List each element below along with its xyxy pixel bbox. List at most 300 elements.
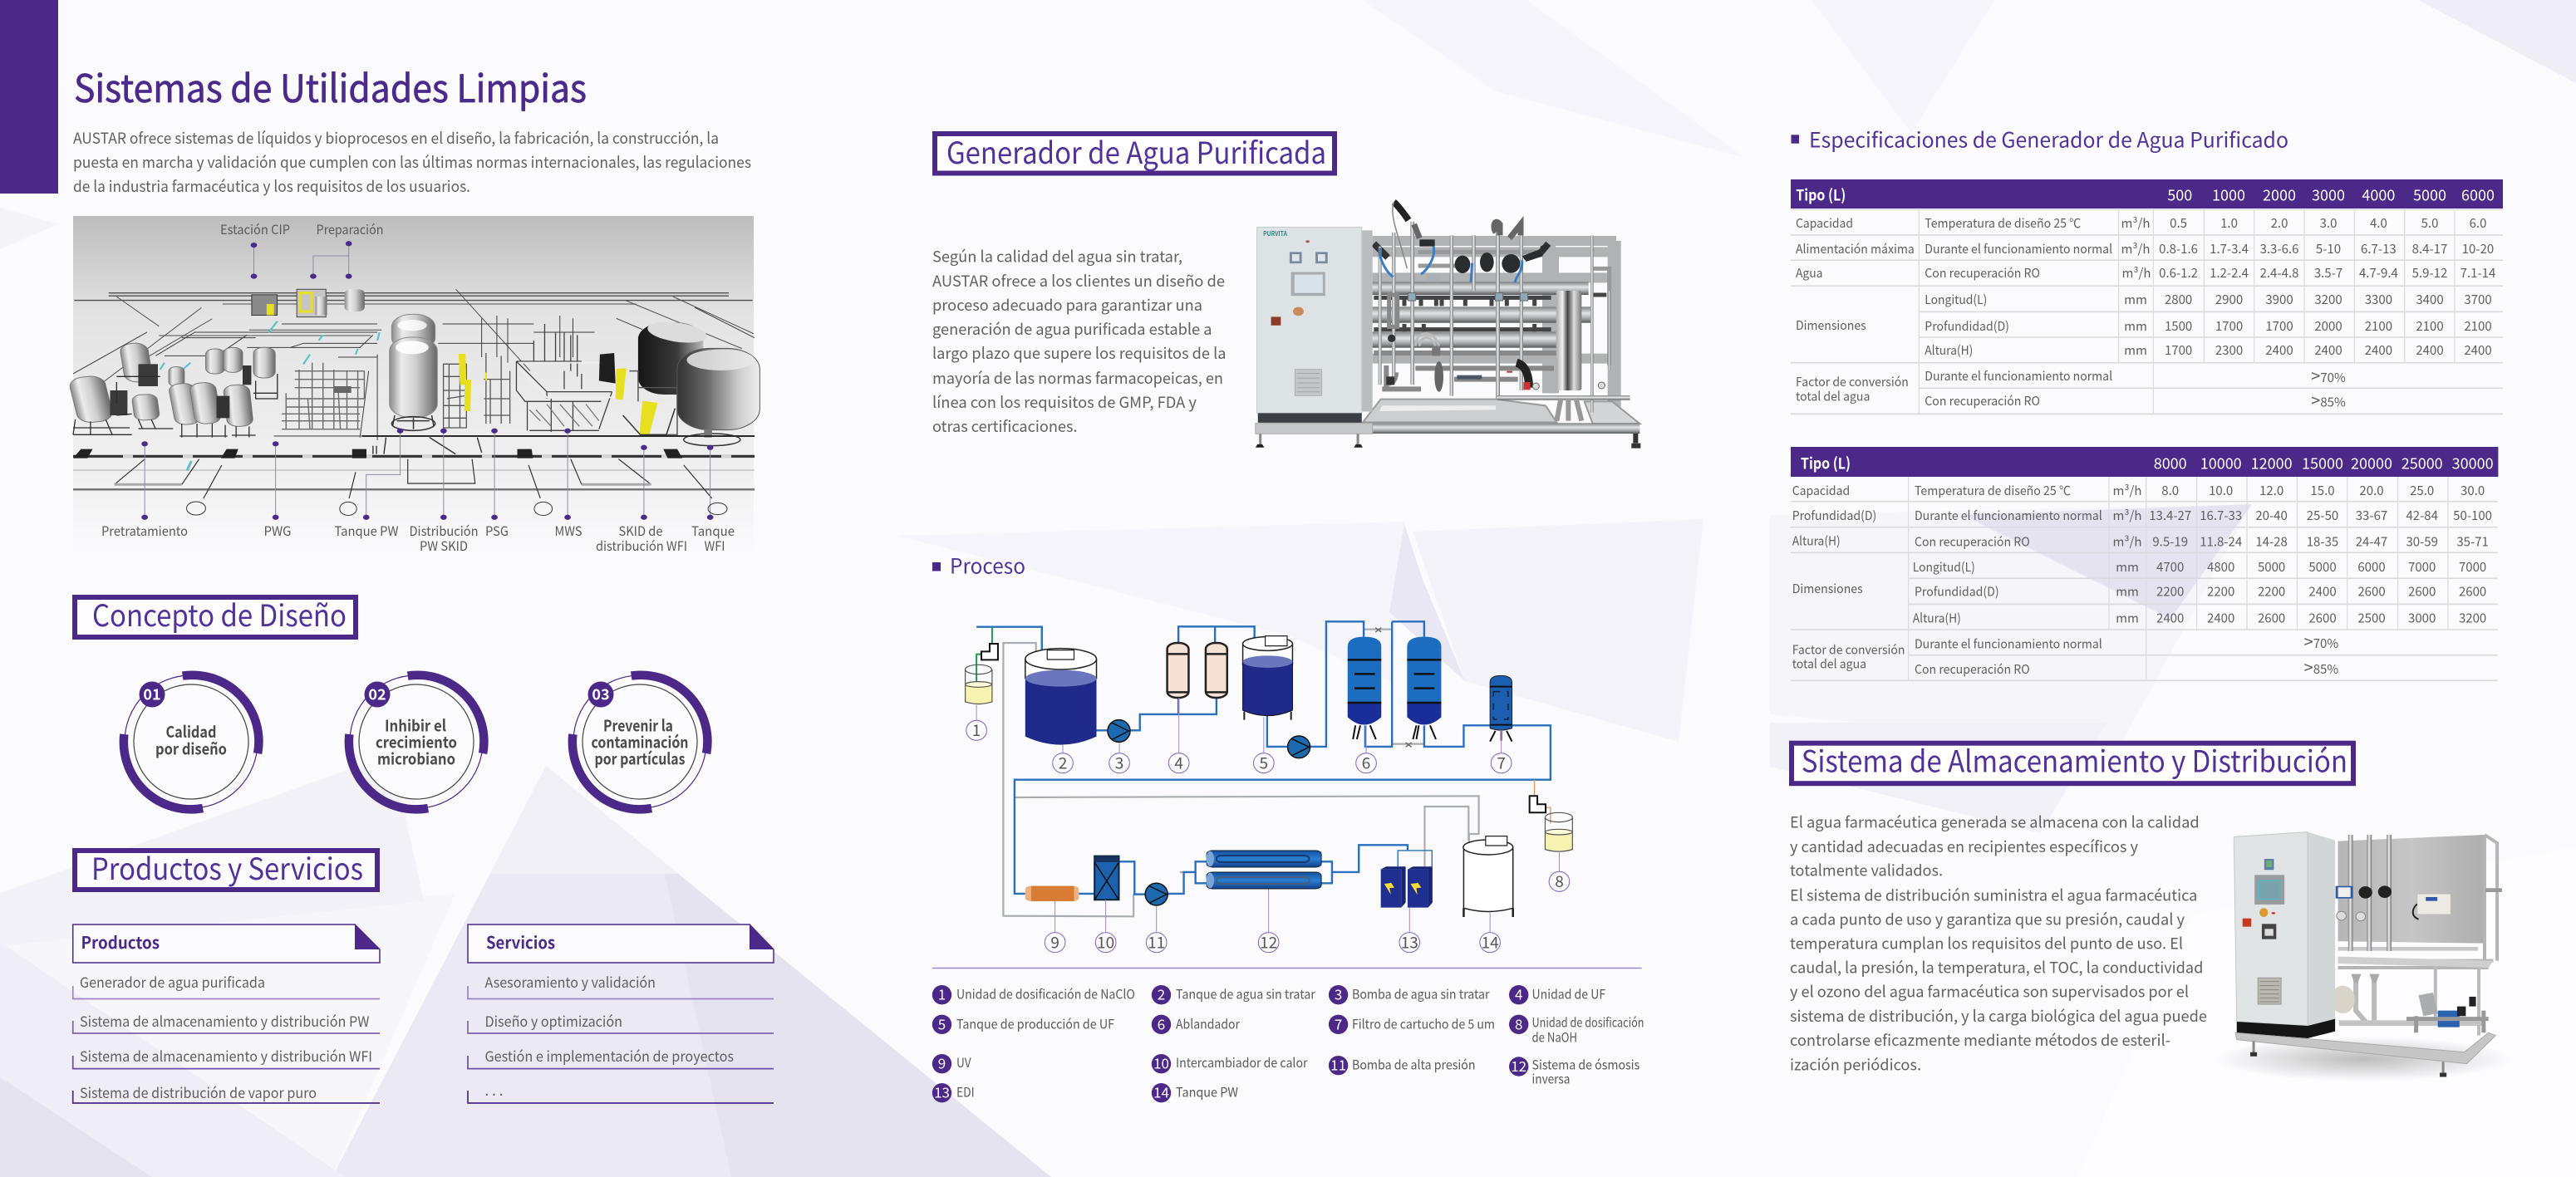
process legend: Bomba de alta presión	[1352, 1055, 1476, 1073]
purified water paragraph: otras certificaciones.	[932, 415, 1077, 437]
specification table 2: Profundidad(D)	[1915, 582, 1999, 600]
specification table 2: Altura(H)	[1792, 532, 1841, 550]
specification table 1: 2800	[2165, 291, 2192, 308]
storage and distribution paragraph: ización periódicos.	[1790, 1053, 1921, 1075]
table 1 header: 3000	[2312, 184, 2345, 206]
specification table 1: Alimentación máxima	[1796, 240, 1915, 257]
design concept ring 02: crecimiento	[376, 731, 457, 753]
design concept ring 01: Calidad	[166, 720, 216, 743]
purified water paragraph: línea con los requisitos de GMP, FDA y	[932, 391, 1197, 413]
table 1 header: 5000	[2413, 184, 2446, 206]
specification table 2: 8.0	[2161, 482, 2179, 499]
specification table 1: >70%	[2311, 363, 2346, 387]
specification table 2: Con recuperación RO	[1915, 660, 2030, 678]
panel: Productos list: Sistema de distribución de vapor puro	[80, 1081, 317, 1102]
process legend: 7	[1335, 1013, 1342, 1033]
base tray	[2235, 1032, 2495, 1064]
specification table 1: 2.0	[2271, 214, 2288, 232]
plant 3D layout image: PWG	[264, 522, 291, 540]
table 2 header: 25000	[2401, 452, 2443, 473]
table 2 header: 10000	[2200, 452, 2242, 473]
design concept ring 02: Inhibir el	[385, 714, 446, 736]
table 2 header	[1791, 447, 2498, 477]
process flow diagram: 13	[1401, 930, 1418, 954]
process legend: 3	[1335, 983, 1342, 1004]
specification table 2: 6000	[2357, 558, 2386, 576]
process flow diagram: 8	[1555, 870, 1564, 892]
heading: Productos y Servicios: Productos y Servicios	[91, 846, 363, 889]
plant 3D layout image: PW SKID	[420, 537, 468, 555]
intro text block: AUSTAR ofrece sistemas de líquidos y bioprocesos en el diseño, la fabricación, la construcción, la	[73, 127, 719, 149]
design concept ring 01: por diseño	[155, 738, 227, 759]
intro text block	[73, 127, 751, 197]
table 2 header: Tipo (L)	[1801, 452, 1851, 473]
specification table 1: 3700	[2464, 291, 2492, 308]
tank 14	[1463, 836, 1513, 917]
specification table 1: 1.7-3.4	[2210, 240, 2249, 257]
productos tab	[73, 924, 380, 963]
panel: Productos list: Sistema de almacenamiento y distribución PW	[80, 1010, 370, 1031]
plant 3D layout image: Estación CIP	[220, 220, 290, 238]
process legend: Filtro de cartucho de 5 um	[1352, 1014, 1495, 1032]
specification table 1: 2100	[2416, 317, 2444, 335]
specification table 2: m³/h	[2112, 507, 2142, 524]
specification table 2: mm	[2116, 558, 2139, 576]
specification table 2: 2400	[2207, 609, 2234, 626]
specification table 1: Dimensiones	[1796, 316, 1866, 334]
specification table 2: 7000	[2408, 558, 2436, 576]
callouts	[141, 241, 727, 520]
specification table 1: 4.0	[2370, 214, 2387, 232]
specification table 2: 2600	[2357, 582, 2386, 600]
specification table 1: mm	[2124, 291, 2147, 308]
lower piping	[2356, 978, 2374, 1024]
beaker 1	[966, 665, 992, 704]
specification table 1: 3900	[2265, 291, 2293, 308]
specification table 2: 35-71	[2456, 532, 2489, 550]
process legend: 2	[1158, 983, 1165, 1004]
specification table 1: Altura(H)	[1925, 341, 1973, 359]
design concept ring 02	[349, 675, 484, 809]
specification table 1: 3.0	[2320, 214, 2337, 232]
specification table 2: 12.0	[2259, 482, 2283, 499]
title: Sistemas de Utilidades Limpias	[74, 59, 587, 114]
specification table 1: Durante el funcionamiento normal	[1925, 240, 2112, 257]
specification table 1: Con recuperación RO	[1925, 392, 2040, 409]
specification table 1: Factor de conversión	[1796, 373, 1909, 390]
table 2 header: 15000	[2302, 452, 2343, 473]
specification table 2: 2500	[2357, 609, 2386, 626]
specification table 2: 3000	[2408, 609, 2436, 626]
left purple accent bar	[0, 0, 58, 194]
specification table 2: 13.4-27	[2149, 507, 2191, 524]
specification table 2: 25.0	[2410, 482, 2434, 499]
storage and distribution paragraph: El sistema de distribución suministra el agua farmacéutica	[1790, 884, 2197, 905]
inner dark fittings	[1374, 295, 1606, 331]
specification table 1: 2100	[2365, 317, 2392, 335]
UF columns	[1168, 643, 1227, 698]
process flow diagram: 9	[1050, 930, 1059, 954]
plant 3D layout image: Tanque	[691, 522, 735, 540]
specification table 1: >85%	[2311, 387, 2346, 411]
specification table 2: 3200	[2459, 609, 2486, 626]
purified water paragraph: largo plazo que supere los requisitos de la	[932, 342, 1227, 364]
specification table 2: 4700	[2156, 558, 2184, 576]
process legend: 12	[1511, 1055, 1526, 1076]
specification table 2: 14-28	[2255, 532, 2288, 550]
process legend: inversa	[1532, 1069, 1571, 1087]
servicios tab	[468, 924, 774, 963]
specification table 1: 0.5	[2170, 214, 2187, 232]
table 2 header: 30000	[2452, 452, 2494, 473]
PW distribution skid	[444, 353, 510, 428]
design concept ring 01	[124, 675, 258, 809]
process legend: 9	[938, 1052, 946, 1073]
specification table 1: 6.0	[2470, 214, 2486, 232]
specification table 2: 30.0	[2460, 482, 2485, 499]
storage and distribution paragraph: El agua farmacéutica generada se almacena con la calidad	[1790, 812, 2200, 833]
specification table 2: 16.7-33	[2200, 507, 2242, 524]
specification table 2: 42-84	[2406, 507, 2438, 524]
EDI	[1381, 866, 1433, 908]
purified water generator machine illustration	[1256, 202, 1640, 448]
specification table 1: Durante el funcionamiento normal	[1925, 367, 2112, 385]
black actuators	[1419, 239, 1548, 273]
specification table 1: 7.1-14	[2460, 264, 2495, 282]
plant 3D layout image: SKID de	[618, 522, 663, 540]
specification table 2: 33-67	[2356, 507, 2387, 524]
design concept ring 03: Prevenir la	[603, 714, 673, 736]
vertical piping	[1379, 222, 1610, 413]
specification table 2: >70%	[2304, 629, 2338, 653]
process legend: 5	[938, 1013, 946, 1033]
process flow diagram: 7	[1497, 751, 1506, 774]
plant 3D layout image: Pretratamiento	[101, 522, 188, 540]
purified water paragraph: AUSTAR ofrece a los clientes un diseño de	[932, 270, 1225, 292]
process flow diagram: 5	[1260, 751, 1268, 774]
central tanks	[390, 314, 437, 430]
specification table 1: m³/h	[2121, 214, 2151, 232]
subheading: Especificaciones: Especificaciones de Generador de Agua Purificado	[1809, 124, 2288, 154]
specification table 1: Agua	[1796, 264, 1823, 282]
specification table 2: Altura(H)	[1913, 609, 1961, 626]
specification table 2: 10.0	[2209, 482, 2233, 499]
heading: Generador de Agua Purificada: Generador de Agua Purificada	[946, 130, 1326, 173]
specification table 1: m³/h	[2121, 264, 2151, 282]
storage and distribution paragraph: y cantidad adecuadas en recipientes específicos y	[1790, 836, 2138, 857]
specification table 2: 2600	[2258, 609, 2285, 626]
specification table 2: 7000	[2459, 558, 2486, 576]
specification table 1: Capacidad	[1796, 214, 1853, 232]
process legend: 10	[1153, 1052, 1169, 1073]
UV	[1025, 886, 1079, 901]
specification table 2: Dimensiones	[1792, 580, 1863, 597]
storage and distribution paragraph	[1790, 812, 2207, 1075]
PWG skid	[274, 363, 364, 436]
specification table 1: 10-20	[2462, 240, 2494, 257]
specification table 1: Longitud(L)	[1925, 291, 1987, 308]
RO membranes	[1207, 851, 1321, 889]
panel: Servicios list: Gestión e implementación de proyectos	[485, 1045, 734, 1066]
plant 3D layout image: PSG	[485, 522, 509, 540]
specification table 2: m³/h	[2112, 532, 2142, 550]
process legend: Tanque de agua sin tratar	[1176, 985, 1316, 1003]
storage and distribution paragraph: sistema de distribución, y la carga biológica del agua puede	[1790, 1005, 2207, 1027]
plant 3D layout image: distribución WFI	[596, 537, 687, 555]
specification table 2: 18-35	[2307, 532, 2338, 550]
purified water generator machine illustration: PURVITA	[1263, 229, 1288, 238]
table 1 header: 6000	[2461, 184, 2495, 206]
specification table 1: 2400	[2365, 341, 2392, 359]
specification table 2: Profundidad(D)	[1792, 507, 1876, 524]
dosing units	[981, 644, 998, 660]
specification table 1: 6.7-13	[2361, 240, 2397, 257]
panel: Servicios list: Asesoramiento y validación	[485, 971, 656, 992]
cabinet	[1362, 230, 1373, 411]
table 1 header: 4000	[2362, 184, 2395, 206]
purified water paragraph: Según la calidad del agua sin tratar,	[932, 246, 1182, 267]
specification table 1: 8.4-17	[2412, 240, 2447, 257]
process legend: de NaOH	[1532, 1027, 1577, 1046]
specification table 2: Con recuperación RO	[1915, 532, 2030, 550]
heat exchanger	[1094, 856, 1118, 900]
specification table 1: 0.6-1.2	[2159, 264, 2198, 282]
table 1 header: 2000	[2263, 184, 2296, 206]
specification table 2: 30-59	[2406, 532, 2438, 550]
specification table 2	[1791, 447, 2498, 680]
design concept ring 03	[573, 675, 707, 809]
intro text block: de la industria farmacéutica y los requisitos de los usuarios.	[73, 175, 470, 197]
process flow diagram: 6	[1362, 751, 1370, 774]
specification table 2: 9.5-19	[2152, 532, 2188, 550]
specification table 1: 3300	[2365, 291, 2392, 308]
design concept ring 03: 03	[592, 683, 610, 704]
specification table 2: 2600	[2459, 582, 2486, 600]
process legend: Tanque PW	[1176, 1083, 1238, 1101]
floor rail	[73, 436, 755, 459]
specification table 1: 0.8-1.6	[2159, 240, 2198, 257]
divider	[932, 967, 1642, 969]
process legend	[932, 983, 1644, 1102]
specification table 2: 2400	[2308, 582, 2337, 600]
process legend: 1	[938, 983, 946, 1004]
specification table 2: 2200	[2258, 582, 2285, 600]
plant 3D layout image: Tanque PW	[334, 522, 399, 540]
cartridge filter	[1490, 675, 1512, 742]
process legend: 13	[934, 1081, 950, 1102]
tank 2	[1025, 649, 1097, 745]
specification table 2: 2600	[2308, 609, 2337, 626]
process legend: Ablandador	[1176, 1014, 1241, 1032]
process flow diagram: 14	[1482, 930, 1499, 954]
table 1 header: 1000	[2212, 184, 2245, 206]
gray return pipes	[1003, 630, 1548, 916]
process legend: 8	[1515, 1013, 1522, 1033]
tank group left	[68, 342, 278, 438]
specification table 2: mm	[2116, 582, 2139, 600]
specification table 1: 3.3-6.6	[2260, 240, 2298, 257]
panel: Servicios list	[468, 924, 774, 1103]
process flow diagram: 2	[1059, 751, 1067, 774]
specification table 2: 2200	[2207, 582, 2234, 600]
process flow diagram: 1	[972, 718, 981, 741]
specification table 1: m³/h	[2121, 240, 2151, 257]
specification table 1	[1791, 179, 2503, 414]
tank 5	[1243, 636, 1292, 720]
specification table 1: 1700	[2215, 317, 2243, 335]
specification table 2: 2600	[2408, 582, 2436, 600]
storage and distribution machine illustration	[2214, 832, 2513, 1081]
process flow diagram: 12	[1260, 930, 1277, 954]
floor outlines	[73, 459, 755, 498]
specification table 1: 2400	[2265, 341, 2293, 359]
specification table 2: 4800	[2207, 558, 2234, 576]
design concept ring 03: por partículas	[595, 748, 685, 769]
process legend: Unidad de UF	[1532, 985, 1605, 1003]
process legend: EDI	[956, 1083, 975, 1101]
process flow diagram: 4	[1174, 751, 1183, 774]
back of plant floor	[74, 289, 754, 405]
design concept ring 01: 01	[143, 683, 161, 704]
process legend: Unidad de dosificación de NaClO	[956, 985, 1135, 1003]
specification table 1: 2400	[2314, 341, 2342, 359]
productos tab: Productos	[81, 929, 160, 954]
specification table 1: mm	[2124, 317, 2147, 335]
panel: Servicios list: ...	[485, 1079, 504, 1100]
specification table 1: 3400	[2416, 291, 2444, 308]
panel: Servicios list: Diseño y optimización	[485, 1010, 622, 1031]
subheading: Proceso: Proceso	[950, 551, 1025, 581]
process legend: 11	[1330, 1054, 1346, 1075]
specification table 2: m³/h	[2112, 482, 2142, 499]
specification table 1: 5.0	[2421, 214, 2438, 232]
stainless panel	[2338, 835, 2485, 944]
specification table 2: Durante el funcionamiento normal	[1915, 635, 2102, 653]
specification table 1: 5.9-12	[2412, 264, 2447, 282]
trays	[1363, 400, 1556, 422]
table 1 header: 500	[2167, 184, 2192, 206]
storage and distribution paragraph: y el ozono del agua farmacéutica son supervisados por el	[1790, 981, 2189, 1003]
table 2 header: 20000	[2351, 452, 2392, 473]
specification table 2: 11.8-24	[2200, 532, 2242, 550]
specification table 2: 25-50	[2307, 507, 2338, 524]
plant 3D layout image: Preparación	[316, 220, 384, 238]
specification table 2: total del agua	[1792, 655, 1866, 672]
specification table 2: 24-47	[2356, 532, 2387, 550]
specification table 1: 1500	[2165, 317, 2192, 335]
specification table 2: Capacidad	[1792, 482, 1850, 499]
cabinet	[2308, 832, 2335, 1026]
design concept ring 02: 02	[368, 683, 386, 704]
table 1 header	[1791, 179, 2503, 208]
specification table 1: Profundidad(D)	[1925, 317, 2009, 335]
heading: Sistema de Almacenamiento y Distribución: Sistema de Almacenamiento y Distribución	[1802, 738, 2347, 781]
specification table 2: mm	[2116, 609, 2139, 626]
table 2 header: 12000	[2251, 452, 2293, 473]
beaker 8	[1545, 812, 1572, 851]
specification table 1: 5-10	[2316, 240, 2341, 257]
specification table 1: 3200	[2314, 291, 2342, 308]
process legend: Intercambiador de calor	[1176, 1053, 1308, 1072]
specification table 1: 1700	[2165, 341, 2192, 359]
specification table 1: 1.2-2.4	[2210, 264, 2249, 282]
MWS module	[516, 324, 612, 432]
panel: Productos list: Generador de agua purificada	[80, 971, 265, 992]
specification table 2: 20.0	[2359, 482, 2384, 499]
specification table 2: Factor de conversión	[1792, 640, 1905, 658]
specification table 1: 2.4-4.8	[2260, 264, 2298, 282]
table 2 header: 8000	[2154, 452, 2187, 473]
process flow diagram: 3	[1115, 751, 1123, 774]
filter vessel and outlet	[1556, 291, 1581, 390]
servicios tab: Servicios	[486, 929, 555, 954]
specification table 1: 2300	[2215, 341, 2243, 359]
process legend: Bomba de agua sin tratar	[1352, 985, 1490, 1003]
pumps	[1108, 720, 1310, 905]
process legend: Tanque de producción de UF	[956, 1014, 1114, 1032]
panel: Productos list: Sistema de almacenamiento y distribución WFI	[80, 1045, 372, 1066]
specification table 1: total del agua	[1796, 387, 1870, 405]
specification table 2: 50-100	[2453, 507, 2492, 524]
process flow diagram	[966, 621, 1572, 954]
specification table 1: 2400	[2464, 341, 2492, 359]
intro text block: puesta en marcha y validación que cumplen con las últimas normas internacionales, las regulaciones	[73, 151, 751, 173]
storage and distribution paragraph: totalmente validados.	[1790, 859, 1943, 880]
storage and distribution paragraph: caudal, la presión, la temperatura, el TOC, la conductividad	[1790, 957, 2203, 978]
design concept ring 03: contaminación	[592, 731, 688, 753]
pipe lattice	[73, 307, 755, 440]
specification table 2: Longitud(L)	[1913, 558, 1975, 576]
plant 3D layout image: Distribución	[409, 522, 479, 540]
table 1 header: Tipo (L)	[1796, 184, 1846, 206]
purified water paragraph	[932, 246, 1227, 437]
specification table 1: 2900	[2215, 291, 2243, 308]
specification table 1: 1700	[2265, 317, 2293, 335]
purified water paragraph: mayoría de las normas farmacopeicas, en	[932, 367, 1223, 389]
softeners	[1348, 637, 1381, 739]
plant 3D layout image: MWS	[555, 522, 582, 540]
purified water paragraph: proceso adecuado para garantizar una	[932, 294, 1202, 316]
process legend: UV	[956, 1053, 971, 1072]
leader lines	[976, 698, 1559, 933]
storage and distribution paragraph: temperatura cumplan los requisitos del punto de uso. El	[1790, 932, 2183, 954]
specification table 2: 20-40	[2255, 507, 2288, 524]
specification table 2: 2400	[2156, 609, 2184, 626]
purified water paragraph: generación de agua purificada estable a	[932, 318, 1212, 340]
specification table 1: 2400	[2416, 341, 2444, 359]
specification table 1: 3.5-7	[2314, 264, 2342, 282]
process legend: 4	[1515, 983, 1522, 1004]
plant 3D layout image	[68, 216, 760, 557]
specification table 2: 2200	[2156, 582, 2184, 600]
process legend: Sistema de ósmosis	[1532, 1055, 1639, 1073]
process legend: 6	[1158, 1013, 1165, 1033]
specification table 2: 5000	[2258, 558, 2285, 576]
process legend: Unidad de dosificación	[1532, 1013, 1644, 1032]
WFI tanks	[638, 322, 703, 395]
specification table 2: >85%	[2304, 655, 2338, 679]
heading: Concepto de Diseño: Concepto de Diseño	[92, 592, 347, 635]
specification table 1: 1.0	[2220, 214, 2238, 232]
specification table 1: 2100	[2464, 317, 2492, 335]
storage and distribution paragraph: a cada punto de uso y garantiza que su presión, caudal y	[1790, 908, 2185, 929]
design concept ring 02: microbiano	[377, 748, 455, 769]
frame	[1373, 241, 1616, 415]
storage and distribution paragraph: controlarse eficazmente mediante métodos de esteril-	[1790, 1029, 2170, 1051]
specification table 2: 5000	[2308, 558, 2337, 576]
specification table 2: Durante el funcionamiento normal	[1915, 507, 2102, 524]
specification table 1: Temperatura de diseño 25 ℃	[1925, 214, 2081, 232]
